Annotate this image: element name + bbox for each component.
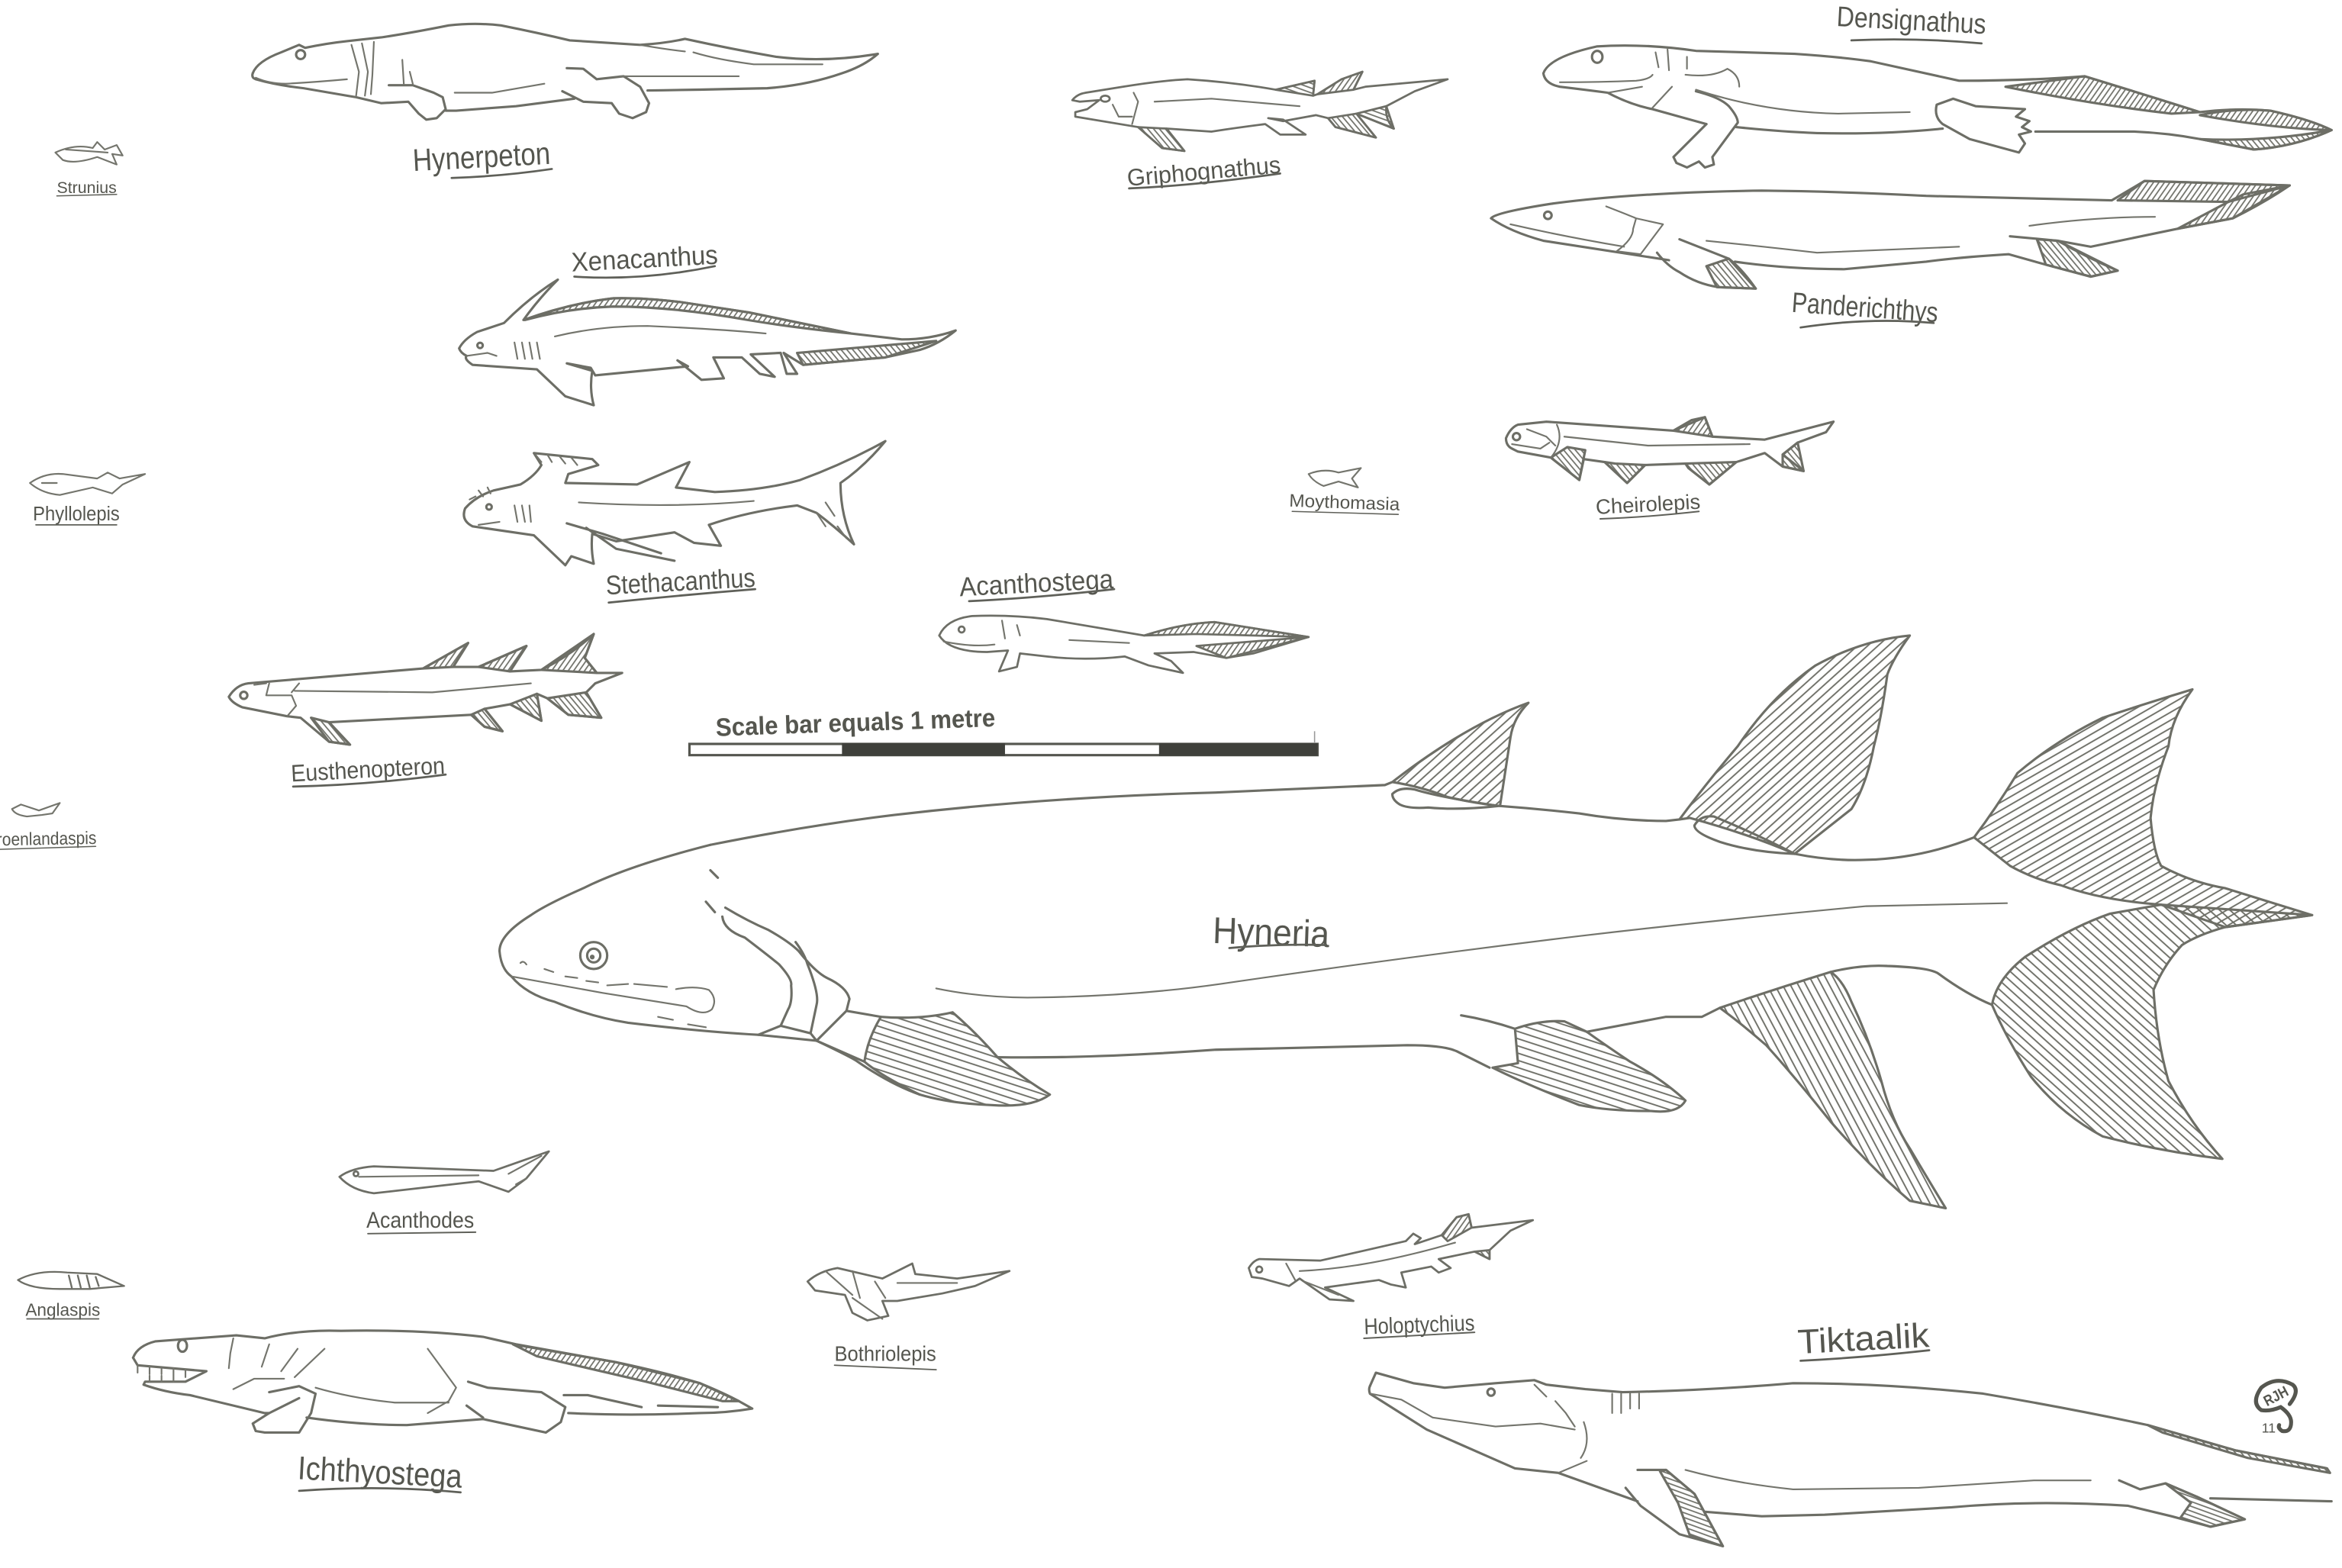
Hyneria operculum [706,871,849,1041]
Hyneria pelvic fin [1493,1021,1686,1112]
Hyneria eye [580,942,607,969]
Hyneria upper tail lobe [1974,689,2312,927]
species: Acanthodes [340,1151,549,1234]
species: Anglaspis [18,1272,124,1320]
species: Hyneria [500,636,2312,1208]
Densignathus drawing [1543,46,2331,167]
Hynerpeton drawing [253,24,878,120]
species: Moythomasia [1289,468,1401,514]
Hyneria anal fin [1720,972,1946,1208]
Hyneria pectoral fin [865,1013,1050,1106]
Phyllolepis label: Phyllolepis [33,504,120,525]
Hyneria first dorsal fin lobe [1393,789,1499,809]
scale bar text: Scale bar equals 1 metre [715,704,996,742]
scale bar [689,704,1318,756]
Moythomasia drawing [1309,468,1361,488]
Ichthyostega label: Ichthyostega [297,1450,463,1496]
Phyllolepis drawing [30,472,145,495]
Eusthenopteron drawing [229,634,622,745]
Acanthostega label: Acanthostega [958,565,1114,602]
species: Stethacanthus [464,441,885,603]
Groenlandaspis drawing [12,803,60,816]
monogram loop [2256,1381,2295,1431]
Strunius drawing [56,142,123,165]
Eusthenopteron label: Eusthenopteron [290,752,446,787]
species: Groenlandaspis [0,803,97,850]
Griphognathus label: Griphognathus [1126,151,1282,192]
species: Tiktaalik [1369,1315,2331,1546]
species: Densignathus [1543,0,2331,167]
Acanthodes drawing [340,1151,549,1193]
Xenacanthus label: Xenacanthus [571,240,719,278]
Acanthostega drawing [939,616,1309,673]
Hyneria belly line [997,966,1992,1067]
artist monogram [2256,1381,2295,1435]
Tiktaalik label: Tiktaalik [1796,1315,1931,1361]
Hyneria second dorsal fin [1680,636,1910,854]
Hyneria pectoral fin base [817,1011,881,1061]
species: Griphognathus [1072,72,1448,192]
Hyneria second dorsal fin lobe [1694,816,1795,854]
species: Holoptychius [1248,1214,1533,1340]
species: Ichthyostega [133,1331,752,1496]
species: Bothriolepis [807,1264,1010,1370]
species: Eusthenopteron [229,634,622,787]
Hynerpeton label: Hynerpeton [412,136,551,178]
species: Cheirolepis [1506,417,1834,519]
species: Strunius [56,142,123,197]
Cheirolepis drawing [1506,417,1834,485]
Bothriolepis drawing [807,1264,1010,1320]
species: Hynerpeton [253,24,878,178]
Hyneria lower tail lobe [1992,905,2312,1159]
Stethacanthus drawing [464,441,885,565]
Hyneria mouth and head lines [511,962,714,1027]
Hyneria body outline [500,845,920,1095]
species: Phyllolepis [30,472,145,525]
monogram letters: RJH [2261,1383,2292,1410]
species: Acanthostega [939,565,1309,673]
Griphognathus drawing [1072,72,1448,151]
Ichthyostega drawing [133,1331,752,1432]
Panderichthys drawing [1491,181,2289,288]
Strunius label: Strunius [56,178,117,197]
Densignathus label: Densignathus [1836,0,1987,40]
Tiktaalik drawing [1369,1373,2331,1546]
species: Xenacanthus [459,240,955,405]
Anglaspis label: Anglaspis [25,1300,100,1320]
Acanthodes label: Acanthodes [366,1208,474,1233]
scale bar segments [689,731,1318,756]
Panderichthys label: Panderichthys [1791,286,1939,328]
Anglaspis drawing [18,1272,124,1289]
Xenacanthus drawing [459,279,955,405]
Cheirolepis label: Cheirolepis [1595,490,1701,519]
monogram year: 11 [2262,1420,2276,1435]
Moythomasia label: Moythomasia [1289,491,1401,514]
Stethacanthus label: Stethacanthus [605,563,756,600]
Hyneria first dorsal fin [1393,703,1529,806]
Hyneria lateral line [936,903,2007,997]
Hyneria back line [710,782,1974,860]
Hyneria label: Hyneria [1212,910,1331,955]
species: Panderichthys [1491,181,2289,328]
Holoptychius drawing [1248,1214,1533,1301]
Bothriolepis label: Bothriolepis [835,1341,936,1365]
Holoptychius label: Holoptychius [1364,1311,1475,1340]
